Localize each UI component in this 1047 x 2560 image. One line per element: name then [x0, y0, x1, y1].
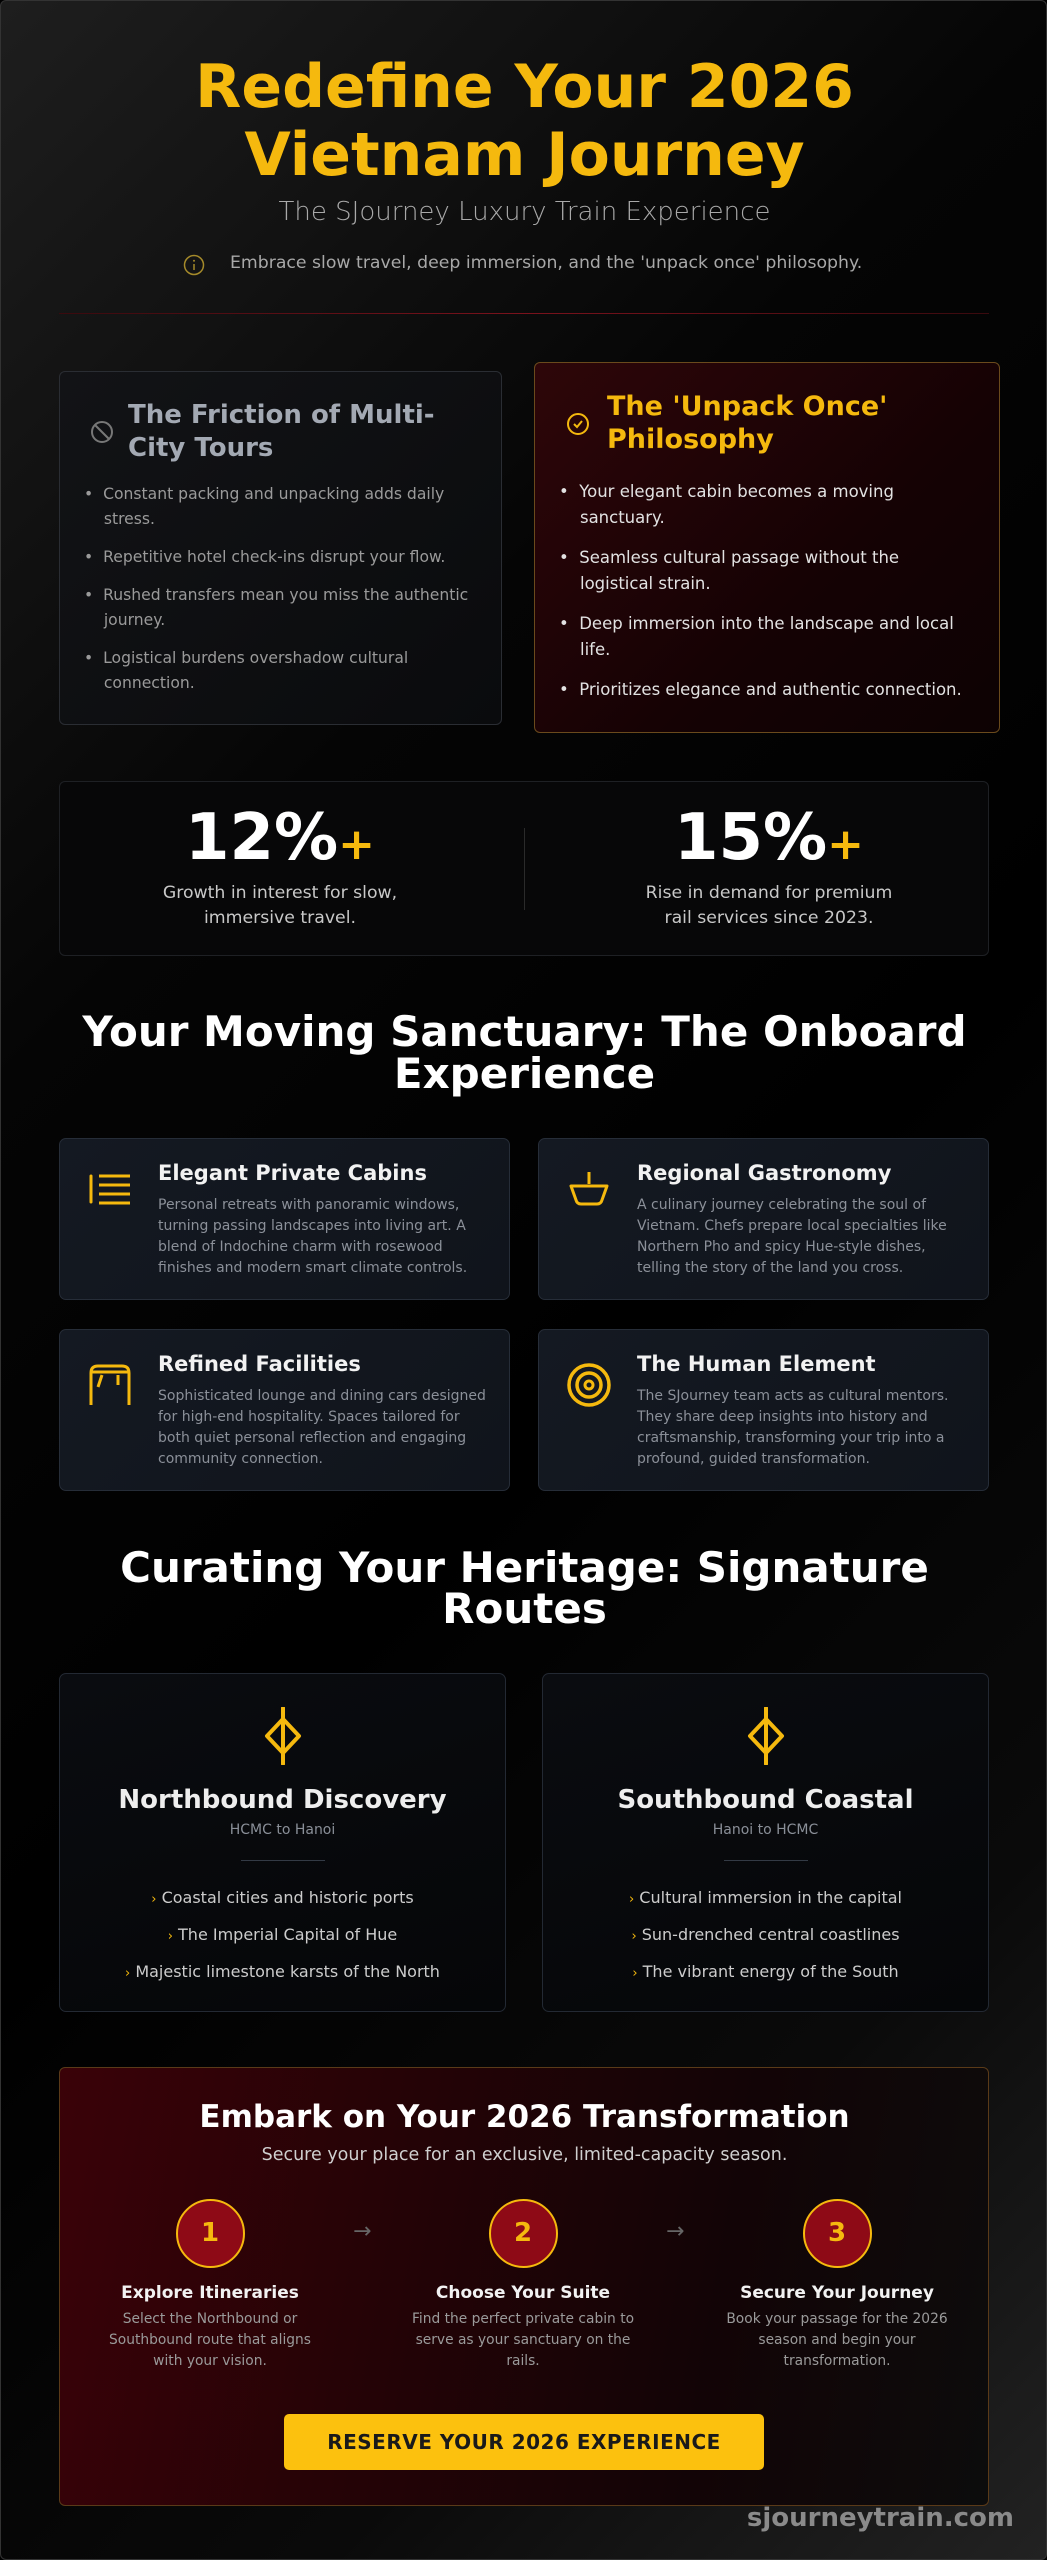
heading [607, 391, 887, 455]
bullet list: • Your elegant cabin becomes a moving [559, 482, 894, 501]
button: RESERVE YOUR 2026 EXPERIENCE [327, 2430, 721, 2454]
step 3: Secure Your Journey [740, 2283, 934, 2303]
heading: Philosophy [607, 424, 774, 455]
bullet list: • Rushed transfers mean you miss the authentic [84, 586, 468, 604]
bullet list: journey. [104, 611, 165, 629]
icon: bowl [569, 1172, 608, 1206]
card: facilities [59, 1329, 510, 1491]
heading: onboard experience: Your Moving Sanctuary: The Onboard [82, 1007, 967, 1056]
stat 2: Rise in demand for premium [646, 883, 892, 903]
icon: check circle [567, 413, 589, 435]
card: human element: The Human Element [637, 1352, 876, 1376]
step 2: 2 [514, 2218, 532, 2248]
card: gastronomy: Regional Gastronomy [637, 1161, 891, 1185]
icon: info [184, 254, 204, 276]
CTA subtitle: Secure your place for an exclusive, limited-capacity season. [262, 2145, 787, 2165]
step 1: with your vision. [153, 2353, 267, 2369]
bullet list [84, 485, 468, 692]
bullet list: • Repetitive hotel check-ins disrupt your flow. [84, 548, 445, 566]
bullet list: • Logistical burdens overshadow cultural [84, 649, 408, 667]
step 2: serve as your sanctuary on the [416, 2332, 630, 2348]
card: northbound [59, 1673, 506, 2012]
step 3: transformation. [784, 2353, 890, 2369]
step 3 [726, 2199, 948, 2369]
card: northbound: HCMC to Hanoi [230, 1822, 335, 1838]
card: southbound: Southbound Coastal [617, 1785, 914, 1815]
tagline with info icon: Embrace slow travel, deep immersion, and the 'unpack once' philosophy. [230, 253, 862, 273]
stat 1: 12%+ [185, 801, 375, 875]
bullet list: logistical strain. [580, 574, 711, 593]
stat 1: Growth in interest for slow, [163, 883, 397, 903]
card: cabins [59, 1138, 510, 1300]
heading: onboard experience: Experience [394, 1049, 655, 1098]
panel: CTA [59, 2067, 989, 2506]
bullet list: stress. [104, 510, 155, 528]
heading: The Friction of Multi-City Tours [128, 400, 435, 463]
card: gastronomy: telling the story of the land you cross. [637, 1260, 903, 1276]
icon: arch [90, 1364, 130, 1405]
card: southbound: › Sun-drenched central coastlines [631, 1925, 900, 1944]
step 1: Select the Northbound or [123, 2311, 297, 2327]
bullet list: • Seamless cultural passage without the [559, 548, 899, 567]
title: Redefine Your 2026 [195, 52, 854, 122]
card: southbound: Hanoi to HCMC [713, 1822, 818, 1838]
bullet list: • Constant packing and unpacking adds daily [84, 485, 444, 503]
arrow: → [353, 2219, 371, 2244]
icon: route diamond [748, 1707, 784, 1765]
panel: friction [59, 371, 502, 725]
heading: The 'Unpack Once' [607, 391, 887, 422]
step 1: 1 [201, 2218, 219, 2248]
icon: ban [91, 421, 113, 443]
subtitle: The SJourney Luxury Train Experience [279, 197, 770, 227]
heading: onboard experience [82, 1007, 967, 1098]
bullet list: • Prioritizes elegance and authentic connection. [559, 680, 962, 699]
bullet list [559, 482, 962, 699]
stat 1 [163, 801, 397, 928]
bullet list: life. [580, 640, 610, 659]
step 2: Choose Your Suite [436, 2283, 610, 2303]
title [195, 52, 854, 190]
CTA title: Embark on Your 2026 Transformation [199, 2099, 850, 2135]
arrow: → [666, 2219, 684, 2244]
step 3: 3 [828, 2218, 846, 2248]
card: northbound: › The Imperial Capital of Hue [168, 1925, 397, 1944]
card: cabins: Personal retreats with panoramic windows, turning passing landscapes into living art. A blend of Indochine charm with rosewood finishes and modern smart climate controls. [158, 1197, 467, 1276]
panel: unpack once [534, 362, 1000, 733]
stat 2: rail services since 2023. [664, 908, 874, 928]
card: northbound: › Majestic limestone karsts of the North [125, 1962, 440, 1981]
heading: signature routes [120, 1543, 929, 1633]
card: gastronomy [538, 1138, 989, 1300]
icon: target [567, 1363, 611, 1407]
card: facilities: Refined Facilities [158, 1352, 361, 1376]
title: Vietnam Journey [244, 120, 805, 190]
step 2 [412, 2199, 634, 2369]
card: northbound: Northbound Discovery [118, 1785, 447, 1815]
bullet list: • Deep immersion into the landscape and local [559, 614, 954, 633]
card: southbound [542, 1673, 989, 2012]
card: gastronomy: A culinary journey celebrating the soul of Vietnam. Chefs prepare local specialties like Northern Pho and spicy Hue-style dishes, [637, 1197, 947, 1255]
bullet list: connection. [104, 674, 195, 692]
card: human element [538, 1329, 989, 1491]
step 2: rails. [506, 2353, 540, 2369]
step 1: Explore Itineraries [121, 2283, 299, 2303]
card: southbound: › Cultural immersion in the capital [629, 1888, 902, 1907]
step 1: Southbound route that aligns [109, 2332, 311, 2348]
card: southbound: › The vibrant energy of the South [632, 1962, 899, 1981]
step 3: season and begin your [758, 2332, 916, 2348]
card: cabins: Elegant Private Cabins [158, 1161, 427, 1185]
card: facilities: Sophisticated lounge and dining cars designed for high-end hospitality. Spaces tailored for both quiet personal reflection and engaging community connection. [158, 1388, 486, 1467]
step 3: Book your passage for the 2026 [726, 2311, 948, 2327]
icon: cabin lines [90, 1174, 130, 1204]
card: northbound: › Coastal cities and historic ports [151, 1888, 414, 1907]
bullet list: sanctuary. [580, 508, 665, 527]
step 2: Find the perfect private cabin to [412, 2311, 634, 2327]
button [284, 2414, 764, 2470]
heading: signature routes: Curating Your Heritage: Signature [120, 1543, 929, 1592]
panel: stats [59, 781, 989, 956]
stat 1: immersive travel. [204, 908, 356, 928]
icon: route diamond [264, 1707, 302, 1765]
stat 2: 15%+ [674, 801, 864, 875]
card: human element: The SJourney team acts as cultural mentors. They share deep insights into history and craftsmanship, transforming your trip into a profound, guided transformation. [637, 1388, 948, 1467]
stat 2 [646, 801, 892, 928]
footer url: sjourneytrain.com [747, 2503, 1014, 2533]
heading: signature routes: Routes [442, 1584, 607, 1633]
step 1 [109, 2199, 311, 2369]
